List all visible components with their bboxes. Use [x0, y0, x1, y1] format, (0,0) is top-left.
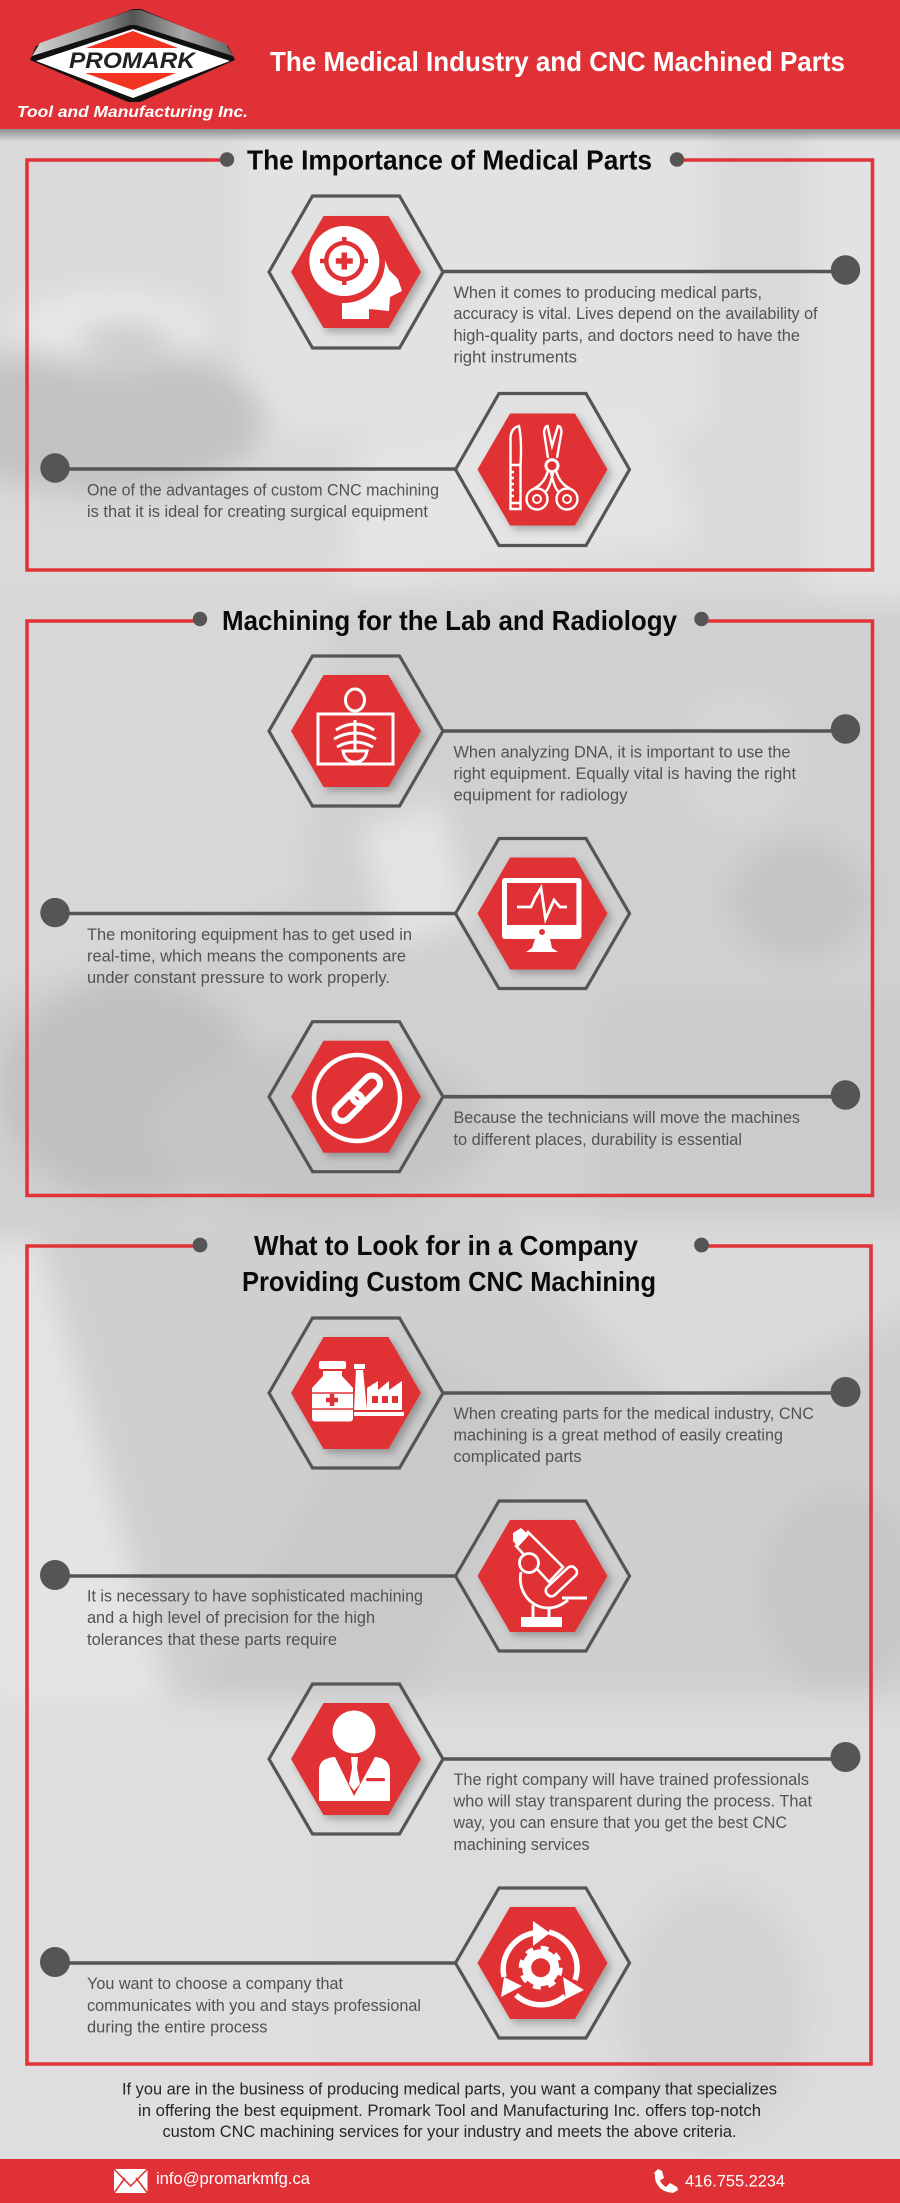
text: real-time, which means the components are: [87, 947, 406, 966]
heading: What to Look for in a Company: [254, 1230, 639, 1261]
icon: target head: [309, 226, 402, 319]
header band: [0, 0, 900, 142]
text: The right company will have trained professionals: [454, 1770, 809, 1789]
text: When creating parts for the medical industry, CNC: [454, 1404, 814, 1423]
text: [87, 925, 412, 987]
text: [453, 1770, 812, 1854]
text: who will stay transparent during the process. That: [453, 1792, 812, 1811]
text: [87, 1974, 421, 2037]
icon: x-ray: [318, 689, 393, 764]
panel: What to Look for in a Company: [27, 1230, 871, 2064]
text: When analyzing DNA, it is important to use the: [454, 742, 790, 762]
logo: Promark diamond: [30, 9, 235, 102]
logo tagline: Tool and Manufacturing Inc.: [17, 104, 248, 121]
icon: gear with cycle arrows: [501, 1921, 584, 2005]
icon: bottle and factory: [312, 1361, 404, 1422]
text: [87, 480, 439, 521]
icon: heart monitor: [502, 878, 582, 952]
text: One of the advantages of custom CNC machining: [87, 480, 439, 499]
text: communicates with you and stays professional: [87, 1996, 421, 2015]
text: You want to choose a company that: [87, 1974, 343, 1993]
text: [87, 1587, 423, 1649]
item: communication: [40, 1888, 630, 2038]
text: It is necessary to have sophisticated machining: [87, 1587, 423, 1606]
text: under constant pressure to work properly.: [87, 968, 390, 987]
text: during the entire process: [87, 2018, 268, 2037]
text: to different places, durability is essential: [454, 1130, 742, 1149]
text: [454, 1404, 814, 1466]
icon: chain link: [314, 1055, 400, 1141]
text: complicated parts: [454, 1447, 582, 1466]
icon: scalpel and scissors: [510, 426, 578, 510]
text: [454, 742, 796, 804]
text: The monitoring equipment has to get used in: [87, 925, 412, 944]
text: tolerances that these parts require: [87, 1630, 337, 1649]
item: monitoring equipment: [40, 838, 630, 988]
icon: professional person: [319, 1710, 390, 1801]
panel: Machining for the Lab and Radiology: [27, 605, 872, 1196]
phone number: 416.755.2234: [685, 2172, 785, 2191]
heading: The Importance of Medical Parts: [247, 144, 652, 176]
icon: microscope: [513, 1528, 587, 1627]
item: trained professionals: [269, 1684, 860, 1854]
text: right instruments: [454, 348, 577, 366]
heading: Machining for the Lab and Radiology: [222, 605, 678, 636]
heading: [242, 1230, 656, 1297]
text: and a high level of precision for the high: [87, 1608, 375, 1627]
text: [454, 283, 818, 366]
text: accuracy is vital. Lives depend on the availability of: [454, 304, 818, 323]
closing text: custom CNC machining services for your industry and meets the above criteria.: [162, 2123, 736, 2141]
title: The Medical Industry and CNC Machined Parts: [270, 46, 845, 77]
email: info@promarkmfg.ca: [156, 2169, 311, 2188]
text: way, you can ensure that you get the best CNC: [453, 1813, 787, 1832]
text: machining services: [454, 1835, 590, 1854]
text: machining is a great method of easily creating: [454, 1426, 783, 1445]
text: right equipment. Equally vital is having the right: [454, 764, 796, 783]
logo: Promark diamond: PROMARK: [69, 48, 197, 73]
item: complicated parts: [269, 1318, 860, 1468]
item: accuracy: [269, 196, 860, 366]
text: is that it is ideal for creating surgical equipment: [87, 502, 428, 521]
text: Because the technicians will move the machines: [454, 1108, 800, 1127]
text: equipment for radiology: [454, 785, 628, 804]
icon: phone: [654, 2169, 678, 2193]
footer band: [0, 2159, 900, 2203]
closing text: If you are in the business of producing medical parts, you want a company that specializes: [122, 2080, 777, 2098]
item: surgical equipment: [40, 394, 630, 546]
item: DNA and radiology: [269, 656, 860, 806]
closing text: [122, 2080, 777, 2141]
closing text: in offering the best equipment. Promark Tool and Manufacturing Inc. offers top-notch: [138, 2102, 761, 2120]
icon: envelope: [114, 2169, 148, 2193]
text: When it comes to producing medical parts,: [454, 283, 762, 302]
item: precision: [40, 1501, 630, 1651]
item: durability: [269, 1022, 860, 1172]
heading: Providing Custom CNC Machining: [242, 1266, 656, 1297]
text: [454, 1108, 800, 1149]
panel: The Importance of Medical Parts: [27, 144, 872, 570]
text: high-quality parts, and doctors need to have the: [454, 326, 800, 345]
